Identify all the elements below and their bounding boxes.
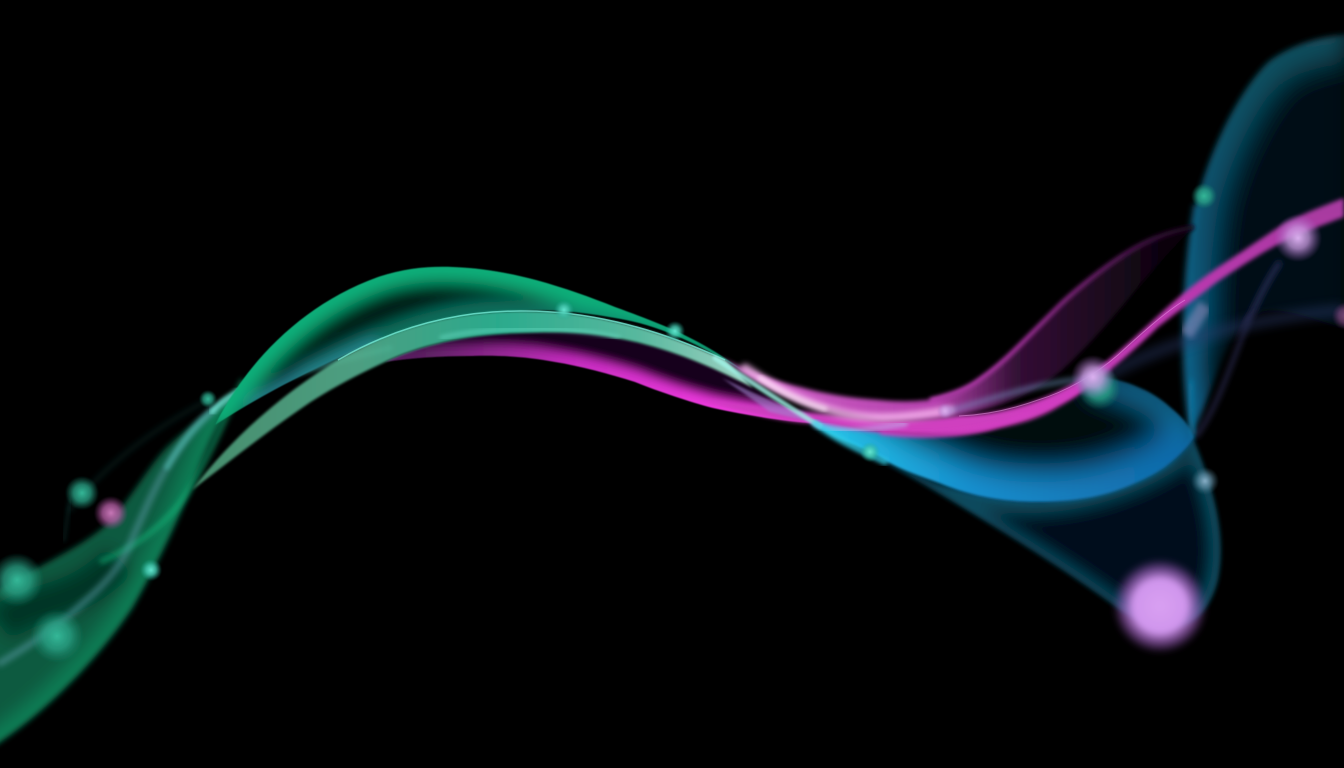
ribbon: blue main xyxy=(800,378,1198,506)
ribbon: blue-teal lower veil xyxy=(895,438,1224,624)
node: large violet orb xyxy=(1112,558,1208,654)
ribbon: pink-white highlight xyxy=(745,368,950,418)
ribbon: pale violet overlay xyxy=(722,378,820,424)
ribbon: green tail xyxy=(0,392,232,747)
ribbon: cyan streak xyxy=(715,358,905,462)
ribbon: cyan-grey strand xyxy=(0,348,390,663)
ribbon: top right blue veil xyxy=(1180,30,1344,437)
ribbon: bright green edge xyxy=(100,380,243,562)
ribbon: lavender crossing xyxy=(1186,305,1205,335)
nodes: glowing points xyxy=(0,183,1344,663)
ribbon: magenta fold to right xyxy=(720,227,1194,420)
ribbon: magenta body xyxy=(386,332,812,424)
ribbon: dim violet strand at right xyxy=(1098,310,1344,380)
ribbon: green upper lobe xyxy=(216,266,741,424)
ribbon: magenta main strand xyxy=(700,198,1344,435)
ribbon: pale green band xyxy=(192,311,753,490)
ribbon: light blue arc xyxy=(945,378,1098,412)
